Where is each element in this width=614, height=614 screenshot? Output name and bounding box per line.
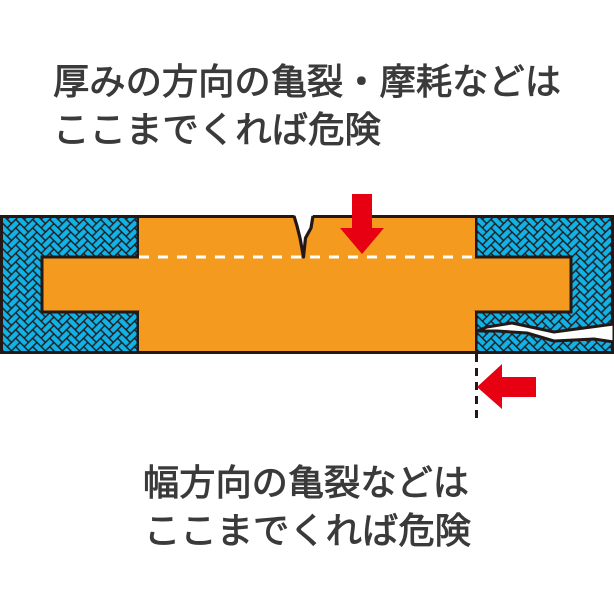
covers for core edges at section joints (139, 218, 475, 351)
dashed wear limit line (139, 256, 476, 258)
panel: belt cross-section (2, 214, 614, 352)
arrow: red left arrow (477, 364, 536, 409)
heading: thickness direction: 厚みの方向の亀裂・摩耗などは (53, 61, 561, 102)
top crack (294, 214, 313, 257)
dashed width limit line (475, 354, 478, 419)
side crack (477, 323, 614, 342)
heading: width direction (143, 462, 471, 551)
heading: width direction: ここまでくれば危険 (144, 510, 471, 551)
orange core (42, 216, 571, 352)
heading: width direction: 幅方向の亀裂などは (143, 462, 469, 503)
heading: thickness direction: ここまでくれば危険 (53, 109, 381, 150)
left blue cord section (2, 216, 138, 352)
heading: thickness direction (53, 61, 561, 150)
arrow: red down arrow (340, 194, 384, 254)
right blue cord section (476, 216, 612, 352)
